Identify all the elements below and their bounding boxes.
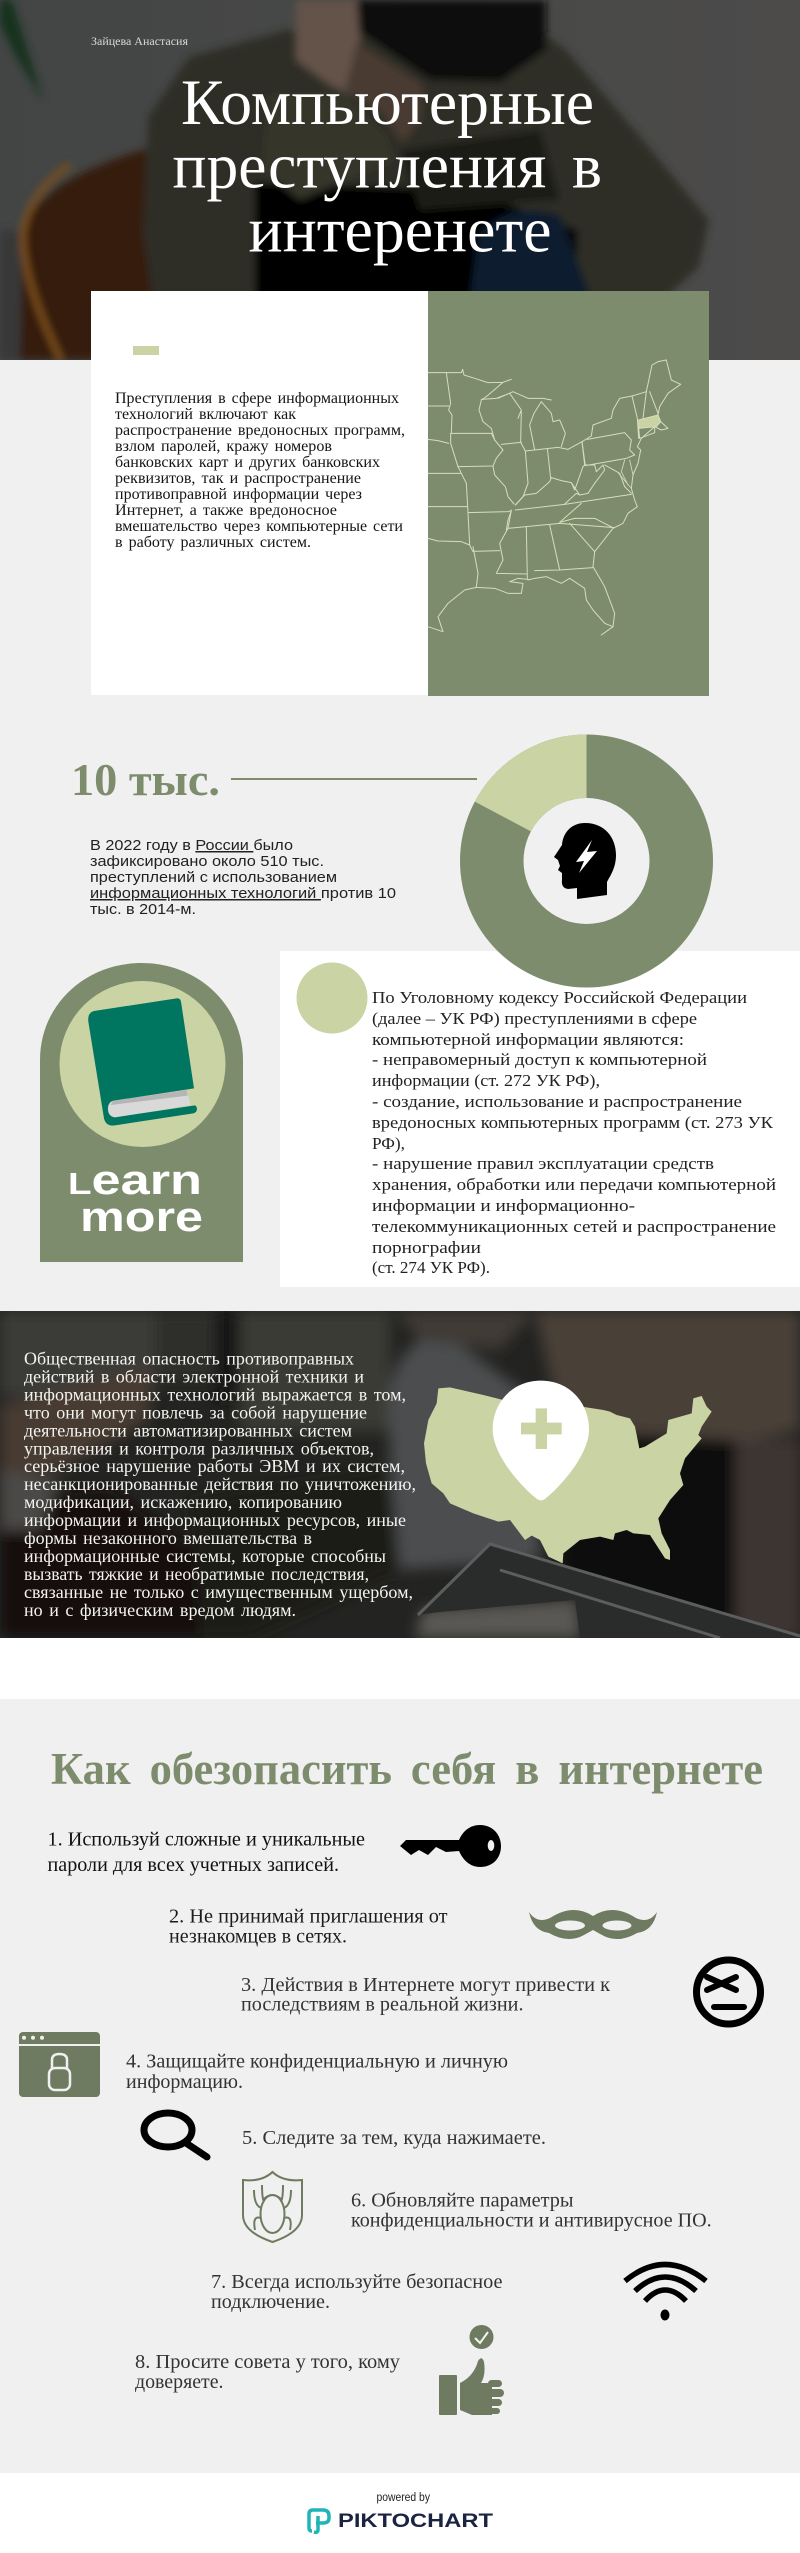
white band xyxy=(0,1638,800,1699)
legal paragraph: информации (ст. 272 УК РФ), xyxy=(372,1071,600,1090)
accent bar xyxy=(133,346,159,355)
danger paragraph: что они могут повлечь за собой нарушение xyxy=(24,1402,367,1422)
tip 2 with mask xyxy=(169,1905,657,1948)
tip 5 with magnifier xyxy=(144,2113,546,2157)
panel: dark photo with danger text xyxy=(0,1311,800,1638)
tip 8 text: доверяете. xyxy=(135,2371,224,2393)
tip 4 text: 4. Защищайте конфиденциальную и личную xyxy=(126,2051,508,2073)
tip 3 text: последствиям в реальной жизни. xyxy=(241,1994,524,2016)
icon: crossed face xyxy=(696,1960,760,2024)
title: преступления в xyxy=(172,131,602,203)
icon: key xyxy=(400,1825,501,1867)
tip 1 text: 1. Используй сложные и уникальные xyxy=(48,1829,365,1851)
legal paragraph: РФ), xyxy=(372,1134,405,1153)
tip 7 text xyxy=(211,2271,503,2313)
legal paragraph: компьютерной информации являются: xyxy=(372,1030,684,1049)
leader line xyxy=(231,778,477,780)
tip 6 text xyxy=(351,2190,712,2232)
piktochart logo xyxy=(309,2492,493,2532)
danger paragraph: но и с физическим вредом людям. xyxy=(24,1600,296,1620)
USA map with location pin xyxy=(424,1381,712,1563)
intro paragraph: банковских карт и других банковских xyxy=(115,454,380,471)
legal paragraph xyxy=(372,988,776,1277)
learn more label: Learn xyxy=(68,1156,202,1203)
decorative circle xyxy=(296,962,368,1034)
icon: browser lock xyxy=(19,2032,100,2097)
legal paragraph: информации и информационно- xyxy=(372,1196,635,1215)
legal paragraph: - неправомерный доступ к компьютерной xyxy=(372,1050,707,1069)
tip 8 with thumbs up xyxy=(135,2325,504,2415)
tip 3 text: 3. Действия в Интернете могут привести к xyxy=(241,1974,610,1996)
learn more label: more xyxy=(80,1193,203,1240)
icon: magnifier xyxy=(144,2113,207,2157)
tip 5 text: 5. Следите за тем, куда нажимаете. xyxy=(242,2127,546,2149)
tip 7 with wifi xyxy=(211,2264,706,2320)
panel: hero photo header xyxy=(0,0,800,360)
intro paragraph: вмешательство через компьютерные сети xyxy=(115,518,403,535)
tip 3 with face xyxy=(241,1960,760,2024)
legal paragraph: По Уголовному кодексу Российской Федерации xyxy=(372,988,747,1007)
stat paragraph: преступлений с использованием xyxy=(90,869,337,886)
danger paragraph: информации и информационных ресурсов, иные xyxy=(24,1510,406,1530)
danger paragraph: модификации, искажению, копированию xyxy=(24,1492,342,1512)
icon: P logo xyxy=(309,2510,329,2532)
intro paragraph: взлом паролей, кражу номеров xyxy=(115,438,332,455)
danger paragraph: информационных технологий выражается в том, xyxy=(24,1384,406,1404)
legal paragraph: (далее – УК РФ) преступлениями в сфере xyxy=(372,1009,697,1028)
panel: intro text card xyxy=(91,291,428,695)
danger paragraph: вызвать тяжкие и необратимые последствия, xyxy=(24,1564,369,1584)
light circle xyxy=(60,981,226,1147)
danger paragraph: информационные системы, которые способны xyxy=(24,1546,386,1566)
tip 1 text xyxy=(48,1829,365,1876)
icon: location pin with plus xyxy=(493,1381,589,1500)
stat paragraph: В 2022 году в России было xyxy=(90,837,293,854)
author name: Зайцева Анастасия xyxy=(91,34,188,48)
tip 1 text: пароли для всех учетных записей. xyxy=(48,1854,339,1876)
icon: shield with bug xyxy=(243,2172,302,2242)
tip 1 with key xyxy=(48,1825,501,1876)
stat paragraph: тыс. в 2014-м. xyxy=(90,901,196,918)
glass table xyxy=(418,1544,800,1638)
legal paragraph: вредоносных компьютерных программ (ст. 273 УК xyxy=(372,1113,774,1132)
tip 8 text: 8. Просите совета у того, кому xyxy=(135,2351,400,2373)
intro paragraph: противоправной информации через xyxy=(115,486,362,503)
tip 2 text xyxy=(169,1905,448,1948)
stat paragraph: информационных технологий против 10 xyxy=(90,885,396,902)
danger paragraph: управления и контроля различных объектов, xyxy=(24,1438,374,1458)
intro paragraph: в работу различных систем. xyxy=(115,534,311,551)
donut chart with head icon xyxy=(460,734,713,988)
title xyxy=(172,67,602,267)
title: Компьютерные xyxy=(181,67,594,139)
legal paragraph: порнографии xyxy=(372,1238,481,1257)
tip 6 with shield xyxy=(243,2172,712,2242)
danger paragraph: формы незаконного вмешательства в xyxy=(24,1528,312,1548)
panel: green map card xyxy=(428,291,709,696)
panel: legal text card xyxy=(280,951,800,1287)
icon: thumbs up with check xyxy=(439,2325,504,2415)
tip 6 text: конфиденциальности и антивирусное ПО. xyxy=(351,2210,712,2232)
stat heading: 10 тыс.: 10 тыс. xyxy=(71,754,220,805)
icon: wifi xyxy=(625,2264,706,2320)
intro paragraph: Преступления в сфере информационных xyxy=(115,390,399,407)
danger paragraph: действий в области электронной техники и xyxy=(24,1366,364,1386)
icon: mask xyxy=(529,1910,657,1939)
legal paragraph: - нарушение правил эксплуатации средств xyxy=(372,1154,714,1173)
danger paragraph xyxy=(24,1348,416,1620)
donut light segment xyxy=(475,734,586,831)
map: eastern US states xyxy=(428,360,681,635)
tip 6 text: 6. Обновляйте параметры xyxy=(351,2190,574,2212)
icon: head with lightning bolt xyxy=(554,823,616,899)
danger paragraph: серьёзное нарушение работы ЭВМ и их систем, xyxy=(24,1456,405,1476)
stat paragraph: зафиксировано около 510 тыс. xyxy=(90,853,324,870)
title: интеренете xyxy=(248,195,552,267)
tip 4 with browser lock xyxy=(19,2032,508,2097)
danger paragraph: Общественная опасность противоправных xyxy=(24,1348,354,1368)
icon: book xyxy=(88,998,197,1126)
intro paragraph: реквизитов, так и распространение xyxy=(115,470,361,487)
tip 7 text: 7. Всегда используйте безопасное xyxy=(211,2271,503,2293)
legal paragraph: хранения, обработки или передачи компьютерной xyxy=(372,1175,776,1194)
danger paragraph: связанные не только с имущественным ущербом, xyxy=(24,1582,413,1602)
heading: how to protect yourself: Как обезопасить себя в интернете xyxy=(51,1744,763,1794)
piktochart logo: PIKTOCHART xyxy=(338,2511,493,2532)
intro paragraph xyxy=(115,390,405,551)
danger paragraph: несанкционированные действия по уничтожению, xyxy=(24,1474,416,1494)
intro paragraph: Интернет, а также вредоносное xyxy=(115,502,337,519)
danger paragraph: деятельности автоматизированных систем xyxy=(24,1420,352,1440)
panel: learn more badge xyxy=(40,963,243,1262)
legal paragraph: - создание, использование и распространение xyxy=(372,1092,742,1111)
tip 4 text xyxy=(126,2051,508,2093)
legal paragraph: (ст. 274 УК РФ). xyxy=(372,1258,490,1277)
intro paragraph: технологий включают как xyxy=(115,406,296,423)
piktochart logo: powered by xyxy=(376,2492,430,2504)
legal paragraph: телекоммуникационных сетей и распространение xyxy=(372,1217,776,1236)
intro paragraph: распространение вредоносных программ, xyxy=(115,422,405,439)
tip 2 text: 2. Не принимай приглашения от xyxy=(169,1905,448,1927)
stat paragraph xyxy=(90,837,396,918)
footer band xyxy=(0,2473,800,2553)
learn more label xyxy=(68,1156,203,1240)
tip 7 text: подключение. xyxy=(211,2291,330,2313)
tip 8 text xyxy=(135,2351,400,2393)
tip 3 text xyxy=(241,1974,610,2016)
tip 2 text: незнакомцев в сетях. xyxy=(169,1926,347,1948)
tip 4 text: информацию. xyxy=(126,2071,243,2093)
